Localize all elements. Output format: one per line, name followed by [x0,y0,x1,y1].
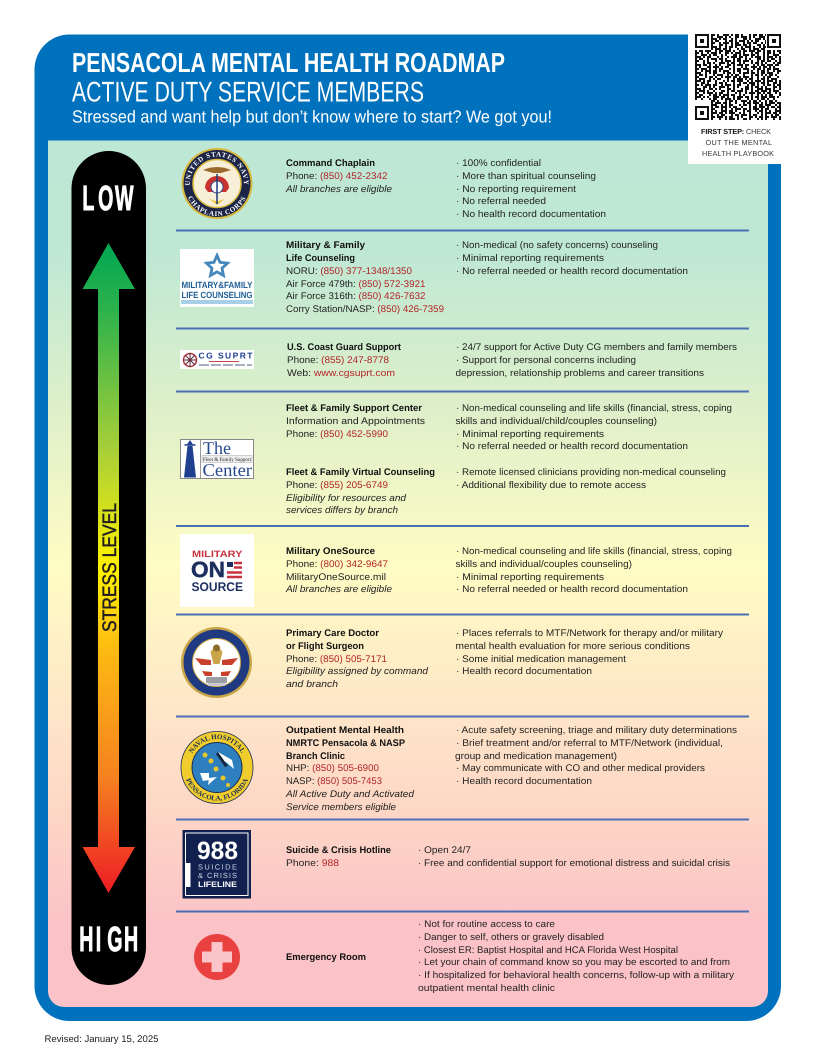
details: · Minimal reporting requirements [456,253,604,264]
details: · If hospitalized for behavioral health concerns, follow-up with a military [418,970,734,981]
details: · No referral needed or health record documentation [456,584,688,595]
contact text: Life Counseling [286,253,355,264]
details: · May communicate with CO and other medical providers [456,763,705,774]
gradient content panel [48,140,768,1007]
row: Military & Family Life Counseling [180,240,688,315]
details: · No referral needed [456,196,546,207]
details: · Free and confidential support for emotional distress and suicidal crisis [418,858,730,869]
details [455,725,737,787]
contact text: NORU: (850) 377-1348/1350 [286,266,412,277]
icon: Naval Hospital Pensacola seal: PENSACOLA, FLORIDA [186,778,248,802]
contact text: NMRTC Pensacola & NASP [286,738,406,749]
details [456,342,737,379]
tagline: Stressed and want help but don’t know where to start? We got you! [72,106,552,126]
icon: The Center logo [180,438,254,480]
details: · Support for personal concerns including [456,355,636,366]
contact text: or Flight Surgeon [286,641,364,652]
icon: MFLC logo: LIFE COUNSELING [182,290,252,300]
details: · Remote licensed clinicians providing non-medical counseling [456,467,726,478]
contact text: Service members eligible [286,802,396,813]
icon: The Center logo: Center [202,460,252,480]
icon: 988 lifeline logo: SUICIDE [198,862,237,872]
details: · Minimal reporting requirements [456,429,604,440]
label: HIGH: HIGH [79,920,138,959]
icon: Navy Chaplain Corps seal: UNITED STATES NAVY [185,152,249,186]
icon: Navy Chaplain Corps seal [182,148,252,219]
QR caption: OUT THE MENTAL [706,138,772,147]
contact text [286,845,391,869]
icon: 988 lifeline logo: 988 [197,837,238,865]
details: · Non-medical (no safety concerns) counseling [456,240,658,251]
icon: 988 lifeline logo [182,830,251,898]
details: · Places referrals to MTF/Network for therapy and/or military [456,628,723,639]
contact text: Phone: (855) 247-8778 [287,355,389,366]
contact text: All Active Duty and Activated [285,789,415,800]
row: Command Chaplain [182,148,606,220]
details: · Health record documentation [456,776,592,787]
details [418,919,734,994]
contact text [286,628,429,690]
contact text [286,403,435,516]
contact text: Air Force 316th: (850) 426-7632 [286,291,426,302]
contact text: NASP: (850) 505-7453 [286,776,382,787]
contact text: NHP: (850) 505-6900 [286,763,379,774]
QR caption [701,127,774,158]
QR caption: HEALTH PLAYBOOK [702,149,774,158]
icon: Military OneSource logo: ON [191,557,225,582]
contact text: All branches are eligible [285,184,392,195]
contact text: Emergency Room [286,952,366,963]
revision date: Revised: January 15, 2025 [44,1034,158,1045]
contact text: Phone: (850) 452-2342 [286,171,388,182]
details: outpatient mental health clinic [418,983,555,994]
contact text: and branch [286,679,338,690]
details: · Non-medical counseling and life skills (financial, stress, coping [456,403,732,414]
details: · Some initial medication management [456,654,626,665]
contact text: Military OneSource [286,546,375,557]
subtitle: ACTIVE DUTY SERVICE MEMBERS [72,76,424,108]
contact text: Military & Family [286,240,366,251]
details: · Danger to self, others or gravely disabled [418,932,604,943]
icon: Naval Branch Health Clinic seal [181,627,252,698]
contact text: Fleet & Family Support Center [286,403,422,414]
details: group and medication management) [455,751,617,762]
details: · Let your chain of command know so you may be escorted to and from [418,957,730,968]
QR code callout [688,34,781,164]
contact text [285,158,392,195]
QR caption: FIRST STEP: CHECK [701,127,771,136]
contact text [285,546,392,595]
icon: Military OneSource logo [180,534,254,607]
icon: The Center logo: The [203,438,231,458]
contact text: Command Chaplain [286,158,375,169]
icon: Navy Chaplain Corps seal: CHAPLAIN CORPS [188,196,246,216]
details: skills and individual/couples counseling) [456,559,632,570]
details [456,546,732,595]
contact text: All branches are eligible [285,584,392,595]
contact text: MilitaryOneSource.mil [286,572,386,583]
QR white card [688,34,781,164]
details: · No reporting requirement [456,184,576,195]
contact text: Phone: (855) 205-6749 [286,480,388,491]
details: · No referral needed or health record documentation [456,441,688,452]
row: Outpatient Mental Health [180,725,737,813]
icon: CG SUPRT logo [180,350,254,369]
icon: Military OneSource logo: SOURCE [192,580,243,594]
details [418,845,730,869]
contact text: Phone: 988 [286,858,339,869]
icon: MFLC logo [180,249,254,307]
contact text: Eligibility assigned by command [286,666,429,677]
black pill [72,151,146,985]
details [456,158,606,220]
details [456,240,688,277]
icon: Naval Hospital Pensacola seal: NAVAL HOSPITAL [188,734,244,754]
contact text: services differs by branch [286,505,398,516]
details: · No referral needed or health record documentation [456,266,688,277]
details: · Minimal reporting requirements [456,572,604,583]
double-headed gradient arrow [82,243,135,893]
label: LOW: LOW [82,179,134,218]
contact text: Branch Clinic [286,751,346,762]
contact text: Phone: (800) 342-9647 [286,559,388,570]
contact text [285,725,415,813]
icon: The Center logo: Fleet & Family Support [203,457,252,463]
contact text: Suicide & Crisis Hotline [286,845,391,856]
details: depression, relationship problems and career transitions [456,368,704,379]
main title: PENSACOLA MENTAL HEALTH ROADMAP [72,47,505,78]
details: · Brief treatment and/or referral to MTF/Network (individual, [456,738,723,749]
icon: Naval Hospital Pensacola seal [180,731,254,804]
icon: MFLC logo: MILITARY&FAMILY [182,280,252,290]
contact text [286,240,444,315]
details: · Additional flexibility due to remote access [456,480,646,491]
details: · 24/7 support for Active Duty CG members and family members [456,342,737,353]
details: skills and individual/child/couples counseling) [456,416,657,427]
contact text: U.S. Coast Guard Support [287,342,402,353]
details [456,403,732,491]
icon: CG SUPRT logo: CG SUPRT [198,350,253,360]
row: Military OneSource [180,534,732,607]
details: · Open 24/7 [418,845,471,856]
details: · 100% confidential [456,158,541,169]
contact text: Corry Station/NASP: (850) 426-7359 [286,304,444,315]
stress level scale [72,151,146,985]
contact text: Primary Care Doctor [286,628,379,639]
label: STRESS LEVEL: STRESS LEVEL [99,503,121,632]
contact text: Phone: (850) 452-5990 [286,429,388,440]
contact text: Web: www.cgsuprt.com [287,368,395,379]
contact text: Phone: (850) 505-7171 [286,654,387,665]
row: Suicide & Crisis Hotline [182,830,730,898]
row: Primary Care Doctor [181,627,723,698]
details: · Health record documentation [456,666,592,677]
icon: Military OneSource logo: MILITARY [192,549,243,559]
details: mental health evaluation for more serious conditions [456,641,690,652]
title block [72,47,552,126]
icon: 988 lifeline logo: & CRISIS [198,871,237,880]
details: · No health record documentation [456,209,606,220]
details: · Not for routine access to care [418,919,555,930]
details: · Closest ER: Baptist Hospital and HCA Florida West Hospital [418,945,678,956]
details: · More than spiritual counseling [456,171,596,182]
contact text: Air Force 479th: (850) 572-3921 [286,279,426,290]
details: · Non-medical counseling and life skills (financial, stress, coping [456,546,732,557]
contact text: Fleet & Family Virtual Counseling [286,467,435,478]
details [456,628,723,677]
icon: red medical cross [194,934,240,980]
contact text [287,342,402,379]
contact text: Outpatient Mental Health [286,725,404,736]
details: · Acute safety screening, triage and military duty determinations [456,725,737,736]
contact text: Information and Appointments [286,416,425,427]
row: Emergency Room [194,919,734,994]
row: Fleet & Family [180,403,732,516]
QR code [695,35,781,119]
row: U.S. Coast Guard Support [180,342,737,379]
contact text: Eligibility for resources and [286,493,407,504]
icon: 988 lifeline logo: LIFELINE [198,880,238,889]
